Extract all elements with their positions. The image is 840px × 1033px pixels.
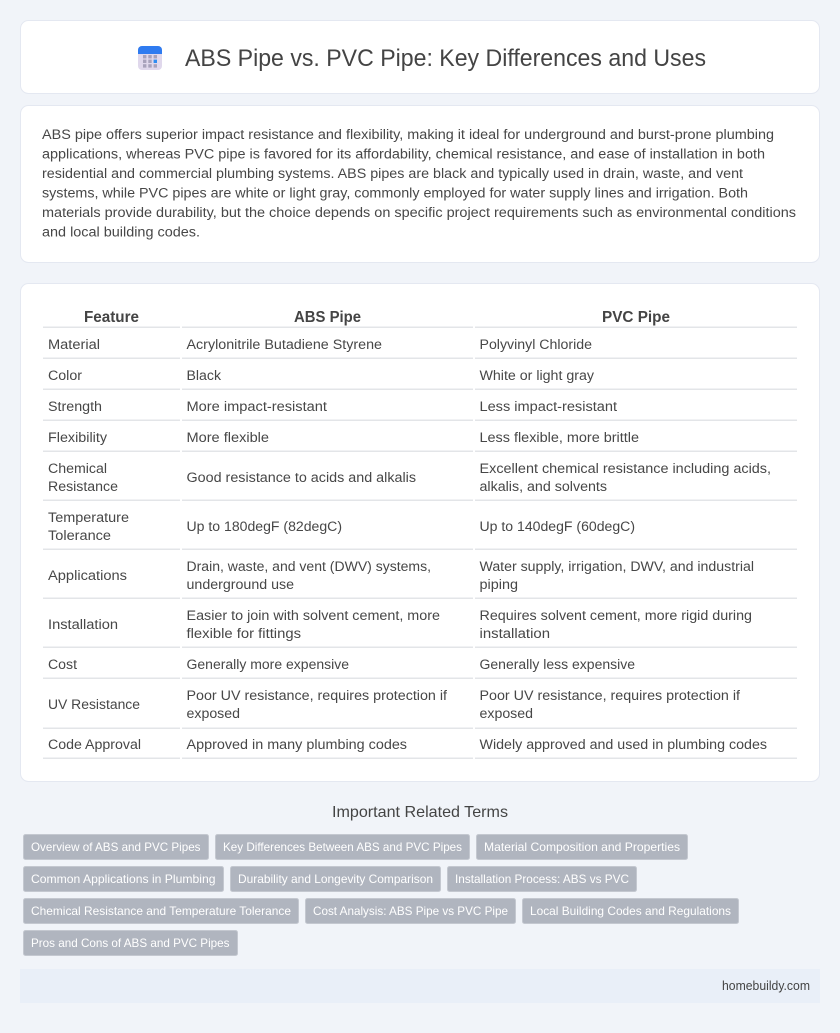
row: code approval: Widely approved and used in plumbing codes [480,737,767,753]
row: temperature tolerance: Temperature [48,510,129,526]
row: applications: underground use [186,577,294,593]
row: color: Black [186,368,222,384]
row: cost: Cost [48,657,77,673]
row: flexibility: Less flexible, more brittle [480,430,639,446]
row: flexibility [48,430,639,446]
row: material: Polyvinyl Chloride [480,337,592,353]
row: installation: installation [480,626,550,642]
footer [20,969,820,1003]
row: installation: flexible for fittings [186,626,301,642]
table header row: ABS Pipe [294,309,361,326]
footer site name: homebuildy.com [722,978,810,993]
row: cost: Generally less expensive [480,657,635,673]
row: temperature tolerance: Up to 140degF (60degC) [480,519,635,535]
row: color [48,368,595,384]
table header row: Feature [84,309,139,326]
row: applications: piping [480,577,518,593]
row: chemical resistance: Resistance [48,479,118,495]
row: cost: Generally more expensive [186,657,349,673]
row: applications: Applications [48,568,127,584]
row: strength: Less impact-resistant [480,399,617,415]
row: strength [48,399,617,415]
intro paragraph: residential and commercial plumbing systems. ABS pipes are black and typically used in drain, waste, and vent [42,166,743,182]
row: code approval: Code Approval [48,737,141,753]
row: cost [48,657,635,673]
row: flexibility: Flexibility [48,430,108,446]
intro paragraph: systems, while PVC pipes are white or light gray, commonly employed for water supply lines and irrigation. Both [42,186,748,202]
row: chemical resistance [48,461,771,495]
row: material: Material [48,337,100,353]
row: chemical resistance: Good resistance to acids and alkalis [186,470,416,486]
panel: introduction [20,106,820,262]
row: temperature tolerance: Tolerance [48,528,111,544]
row: chemical resistance: Chemical [48,461,107,477]
related terms tags: Chemical Resistance and Temperature Tolerance [31,904,291,918]
table header row: PVC Pipe [602,309,670,326]
row: strength: More impact-resistant [186,399,327,415]
row: chemical resistance: Excellent chemical resistance including acids, [480,461,771,477]
intro paragraph: and local building codes. [42,224,200,240]
row: uv resistance: Poor UV resistance, requires protection if [480,688,740,704]
related terms tags: Installation Process: ABS vs PVC [455,872,629,886]
row: uv resistance: UV Resistance [48,697,140,713]
row: color: Color [48,368,82,384]
row: uv resistance [48,688,740,722]
related terms heading: Important Related Terms [332,804,508,821]
row: applications [48,559,754,593]
related terms tags: Cost Analysis: ABS Pipe vs PVC Pipe [313,904,508,918]
row: installation: Requires solvent cement, more rigid during [480,608,752,624]
related terms tags: Durability and Longevity Comparison [238,872,433,886]
intro paragraph: materials provide durability, but the choice depends on specific project requirements such as environmental conditions [42,205,796,221]
row: applications: Water supply, irrigation, DWV, and industrial [480,559,754,575]
row: uv resistance: exposed [186,706,240,722]
header panel [20,20,820,94]
row: strength: Strength [48,399,102,415]
row: code approval [48,737,767,753]
related terms tags [24,834,738,956]
row: uv resistance: exposed [480,706,533,722]
row: uv resistance: Poor UV resistance, requires protection if [186,688,447,704]
row: installation: Easier to join with solvent cement, more [186,608,440,624]
title: ABS Pipe vs. PVC Pipe: Key Differences and Uses [185,45,706,72]
intro paragraph: ABS pipe offers superior impact resistance and flexibility, making it ideal for underground and burst-prone plumbing [42,127,774,143]
row: temperature tolerance [48,510,635,544]
row: material [48,337,592,353]
related terms tags: Material Composition and Properties [484,840,680,854]
related terms tags: Pros and Cons of ABS and PVC Pipes [31,936,230,950]
related terms tags: Overview of ABS and PVC Pipes [31,840,200,854]
row: color: White or light gray [480,368,595,384]
intro paragraph: applications, whereas PVC pipe is favored for its affordability, chemical resistance, and ease of installation in both [42,146,765,162]
related terms tags: Common Applications in Plumbing [31,872,216,886]
row: applications: Drain, waste, and vent (DWV) systems, [186,559,431,575]
row: temperature tolerance: Up to 180degF (82degC) [186,519,342,535]
row: installation [48,608,752,642]
row: material: Acrylonitrile Butadiene Styrene [186,337,382,353]
row: flexibility: More flexible [186,430,269,446]
panel: comparison table [20,284,820,782]
related terms tags: Local Building Codes and Regulations [530,904,731,918]
row: installation: Installation [48,617,118,633]
row: code approval: Approved in many plumbing codes [186,737,407,753]
row: chemical resistance: alkalis, and solvents [480,479,607,495]
intro paragraph [42,127,796,240]
icon: calendar [138,46,162,70]
table header row [84,309,670,326]
related terms tags: Key Differences Between ABS and PVC Pipes [223,840,462,854]
